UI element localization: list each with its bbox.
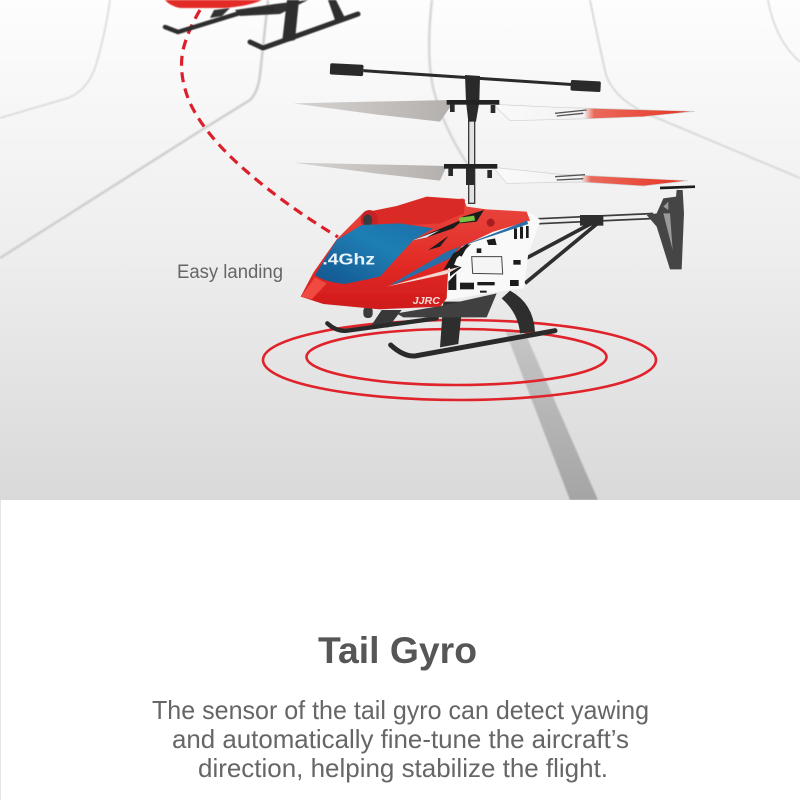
blue canopy with model label: 2.4Ghz: [312, 252, 375, 269]
landing target rings: [263, 320, 656, 400]
camera lens: [361, 210, 378, 230]
road wedge below helicopter: [505, 330, 598, 500]
cockpit top fin: [363, 197, 465, 227]
blue canopy with model label: [312, 223, 433, 284]
description text: and automatically fine-tune the aircraft’s: [172, 724, 629, 754]
nose highlight: [301, 277, 327, 299]
tail boom and struts: [525, 215, 653, 283]
description text: [152, 695, 649, 783]
dashed descent path: [182, 10, 338, 237]
panel: grey studio background: [0, 0, 800, 500]
panel: white caption area: [0, 500, 800, 800]
rotor mast and hubs: [444, 75, 499, 203]
red fuselage: [301, 198, 530, 309]
JJRC logo: JJRC: [413, 296, 441, 307]
white rear fuselage: [445, 212, 541, 301]
flybar with weights: [330, 63, 601, 92]
description text: The sensor of the tail gyro can detect yawing: [152, 695, 649, 725]
landing skids: [327, 291, 555, 356]
label: easy landing: Easy landing: [177, 262, 283, 283]
upper rotor blades: [293, 100, 695, 122]
helicopter main: [293, 63, 695, 356]
description text: direction, helping stabilize the flight.: [198, 753, 608, 783]
tail fin and tail rotor: [647, 187, 695, 269]
side stripes: [387, 210, 528, 287]
heading: Tail Gyro: [318, 630, 477, 671]
background road lines: [0, 0, 800, 258]
helicopter above, leaving frame: [165, 0, 358, 48]
lower rotor blades: [293, 163, 688, 186]
